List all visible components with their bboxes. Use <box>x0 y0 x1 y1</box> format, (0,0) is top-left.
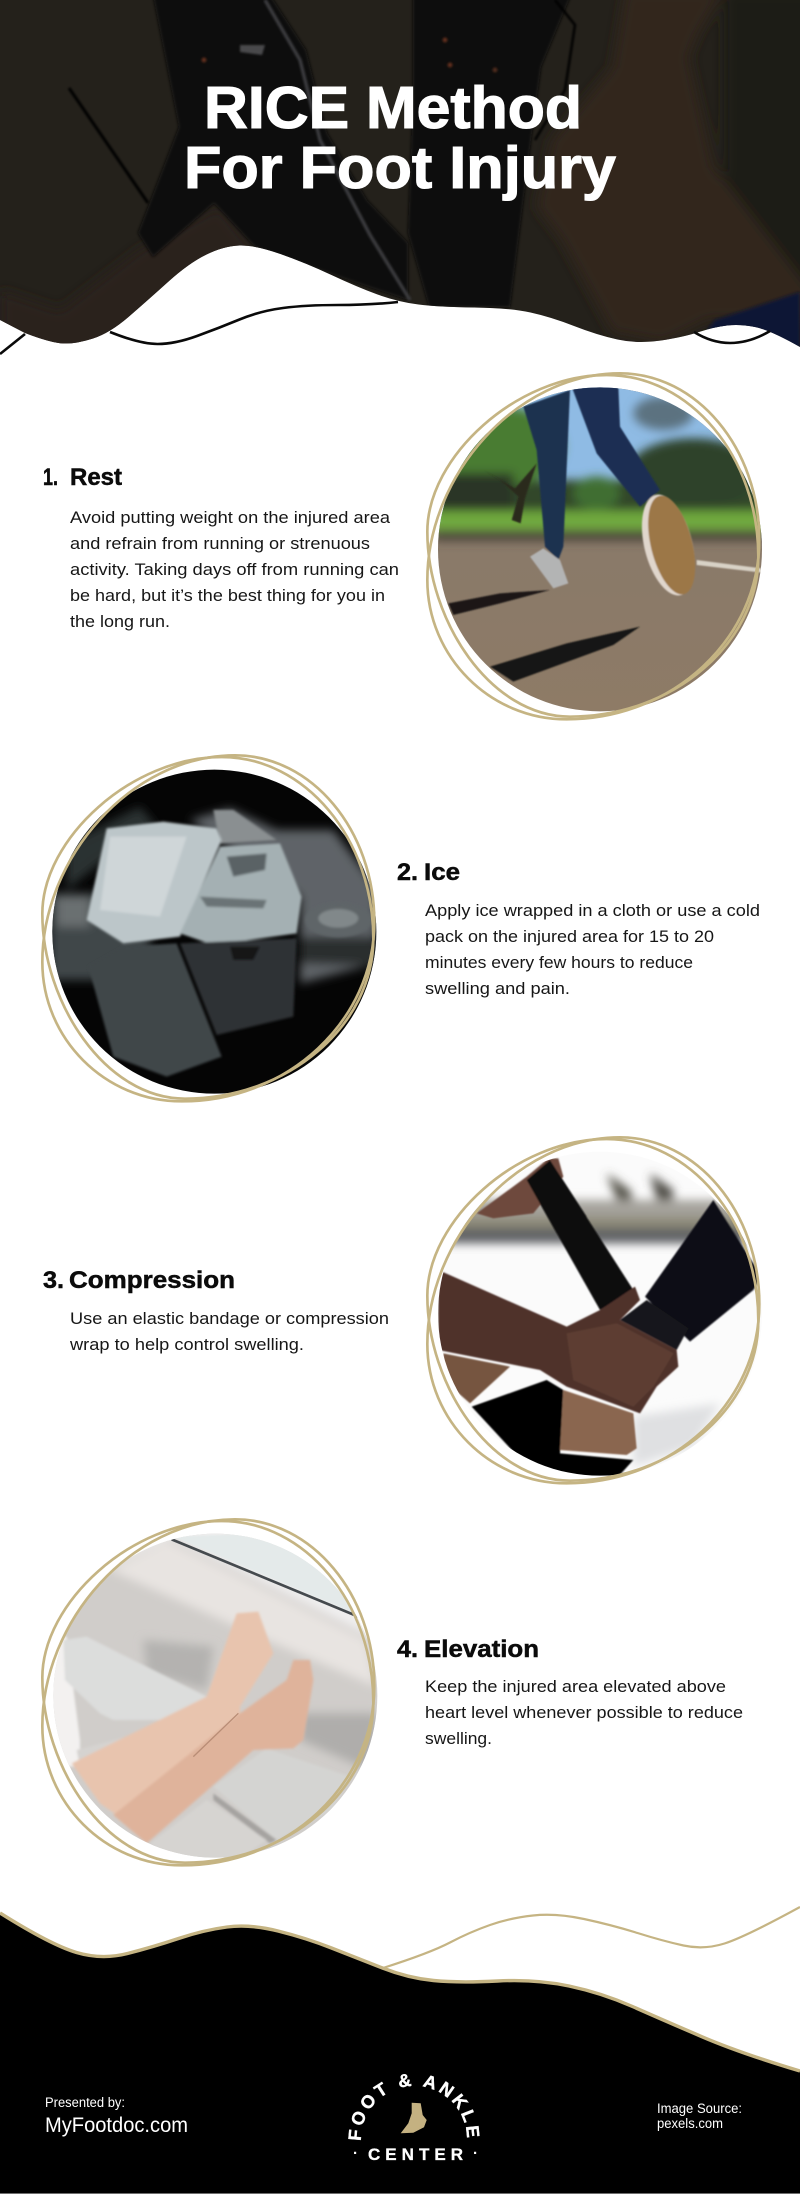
footer text: image source <box>657 2101 742 2131</box>
footer wave background <box>0 1913 800 2194</box>
text block: rest: the long run. <box>70 612 170 631</box>
photo: hands wrapping an ankle <box>433 1147 767 1480</box>
heading: elevation: 4. <box>397 1636 418 1663</box>
heading: compression: Compression <box>69 1267 235 1294</box>
icon: foot <box>401 2103 427 2133</box>
heading: ice: Ice <box>424 859 460 886</box>
footer text: image source: pexels.com <box>657 2116 723 2131</box>
footer text: image source: Image Source: <box>657 2101 742 2116</box>
text block: rest: be hard, but it’s the best thing for you in <box>70 586 385 605</box>
text block: compression: Use an elastic bandage or compression <box>70 1309 389 1328</box>
decorative gold rings: elevation <box>42 1519 374 1865</box>
text block: compression <box>69 1309 389 1354</box>
text block: elevation: heart level whenever possible to reduce <box>425 1703 743 1722</box>
text block: rest: and refrain from running or strenuous <box>70 534 370 553</box>
title: RICE Method <box>204 75 582 141</box>
text block: ice: minutes every few hours to reduce <box>425 953 693 972</box>
panel: compression <box>43 1137 767 1483</box>
footer text: presented by: MyFootdoc.com <box>45 2114 188 2137</box>
decorative gold rings: compression <box>427 1137 759 1483</box>
decorative gold rings: rest <box>427 373 759 719</box>
heading: compression: 3. <box>43 1267 64 1294</box>
footer logo: Foot & Ankle Center: · <box>473 2145 478 2162</box>
heading: rest: Rest <box>70 464 122 491</box>
hero banner photo <box>0 0 800 360</box>
footer logo: Foot & Ankle Center: FOOT & ANKLE <box>348 2074 480 2140</box>
footer logo: Foot & Ankle Center: CENTER <box>368 2145 463 2164</box>
heading: elevation: Elevation <box>424 1636 539 1663</box>
text block: ice <box>425 901 760 998</box>
text block: compression: wrap to help control swelling. <box>69 1335 304 1354</box>
panel: ice <box>42 755 760 1101</box>
text block: elevation: Keep the injured area elevated above <box>425 1677 726 1696</box>
footer text: presented by: Presented by: <box>45 2095 125 2110</box>
footer logo: Foot & Ankle Center: · <box>353 2145 358 2162</box>
photo: runner's legs on a park path <box>433 383 767 717</box>
text block: elevation <box>425 1677 743 1748</box>
text block: ice: Apply ice wrapped in a cloth or use a cold <box>425 901 760 920</box>
title: For Foot Injury <box>184 135 616 201</box>
photo: ice cubes on black <box>47 763 383 1100</box>
heading: rest: 1. <box>43 464 58 491</box>
photo: bare feet raised on a radiator <box>47 1527 383 1863</box>
text block: rest <box>70 508 399 631</box>
heading: rest <box>43 464 122 491</box>
footer text: presented by <box>45 2095 188 2137</box>
wave line accents on hero <box>0 302 770 354</box>
panel: rest <box>43 373 767 719</box>
heading: ice <box>397 859 460 886</box>
text block: ice: swelling and pain. <box>425 979 570 998</box>
decorative gold rings: ice <box>42 755 374 1101</box>
panel: elevation <box>42 1519 743 1865</box>
title <box>184 75 616 201</box>
footer gold edge lines <box>0 1907 800 2071</box>
text block: rest: Avoid putting weight on the injured area <box>70 508 391 527</box>
text block: elevation: swelling. <box>425 1729 492 1748</box>
text block: ice: pack on the injured area for 15 to 20 <box>425 927 714 946</box>
text block: rest: activity. Taking days off from running can <box>70 560 399 579</box>
heading: ice: 2. <box>397 859 418 886</box>
footer logo: Foot & Ankle Center <box>348 2074 480 2164</box>
